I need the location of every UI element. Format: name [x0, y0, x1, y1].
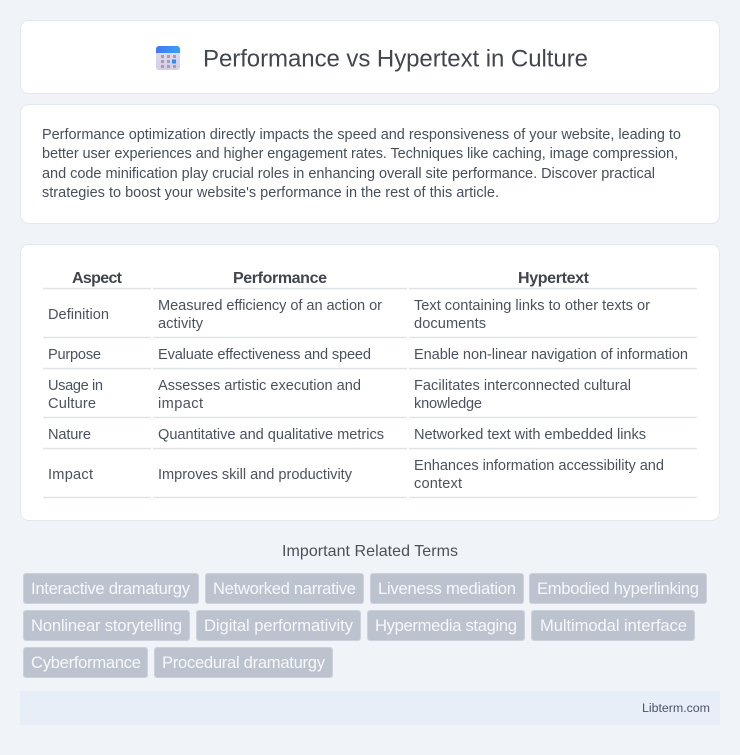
- table header: Performance: [233, 270, 327, 287]
- tag: [206, 574, 364, 604]
- tag: [370, 574, 524, 604]
- tag: [154, 648, 332, 678]
- intro text: better user experiences and higher engagement rates. Techniques like caching, image compression,: [42, 146, 678, 162]
- tag: [532, 610, 694, 640]
- row: purpose: Enable non-linear navigation of information: [414, 347, 688, 363]
- row: usage in culture: Facilitates interconnected cultural: [414, 378, 631, 394]
- row: usage in culture: impact: [158, 396, 203, 412]
- tag: Multimodal interface: [540, 616, 687, 635]
- tag: Nonlinear storytelling: [31, 616, 182, 635]
- table header: Aspect: [72, 270, 123, 287]
- tag: [24, 574, 198, 604]
- tag: Hypermedia staging: [375, 616, 517, 635]
- footer credit: Libterm.com: [642, 701, 710, 715]
- tag: [530, 574, 706, 604]
- row: nature: Networked text with embedded links: [414, 427, 646, 443]
- icon: calendar grid: [156, 46, 180, 70]
- row: impact: context: [414, 476, 462, 492]
- intro text: and code minification play crucial roles in enhancing overall site performance. Discover practical: [42, 166, 655, 182]
- row: purpose: [48, 347, 688, 363]
- row: nature: [48, 427, 646, 443]
- row: definition: Text containing links to other texts or: [414, 298, 650, 314]
- row: nature: Quantitative and qualitative metrics: [158, 427, 384, 443]
- row: definition: [48, 298, 650, 332]
- tag: Cyberformance: [31, 653, 141, 672]
- header panel: [20, 20, 720, 94]
- related terms tags: [24, 574, 706, 678]
- tag: Procedural dramaturgy: [162, 653, 326, 672]
- row: usage in culture: [48, 378, 631, 412]
- tag: Liveness mediation: [378, 579, 516, 598]
- row: purpose: Purpose: [48, 347, 101, 363]
- row: usage in culture: Assesses artistic execution and: [158, 378, 361, 394]
- intro text: [42, 127, 681, 201]
- tag: Digital performativity: [204, 616, 354, 635]
- row: definition: Definition: [48, 307, 109, 323]
- row: usage in culture: Culture: [48, 396, 96, 412]
- tag: [196, 610, 360, 640]
- footer bar: [20, 691, 720, 725]
- tag: Interactive dramaturgy: [31, 579, 191, 598]
- intro text: strategies to boost your website's performance in the rest of this article.: [42, 185, 499, 201]
- row: impact: Improves skill and productivity: [158, 467, 353, 483]
- row: usage in culture: Usage in: [48, 378, 103, 394]
- row: impact: Enhances information accessibility and: [414, 458, 664, 474]
- heading: important related terms: Important Related Terms: [282, 543, 458, 560]
- tag: [24, 648, 148, 678]
- row: definition: Measured efficiency of an action or: [158, 298, 382, 314]
- row: impact: [48, 458, 664, 492]
- row: impact: Impact: [48, 467, 93, 483]
- row: usage in culture: knowledge: [414, 396, 482, 412]
- title: Performance vs Hypertext in Culture: [203, 46, 588, 72]
- panel: comparison table: [20, 244, 720, 520]
- tag: [24, 610, 190, 640]
- tag: Networked narrative: [213, 579, 356, 598]
- table header: [72, 270, 590, 287]
- row: nature: Nature: [48, 427, 91, 443]
- row: purpose: Evaluate effectiveness and speed: [158, 347, 371, 363]
- row: definition: activity: [158, 316, 204, 332]
- table header: Hypertext: [518, 270, 590, 287]
- intro text: Performance optimization directly impacts the speed and responsiveness of your website, leading to: [42, 127, 681, 143]
- tag: Embodied hyperlinking: [537, 579, 699, 598]
- row: definition: documents: [414, 316, 486, 332]
- panel: introduction: [20, 104, 720, 224]
- tag: [368, 610, 524, 640]
